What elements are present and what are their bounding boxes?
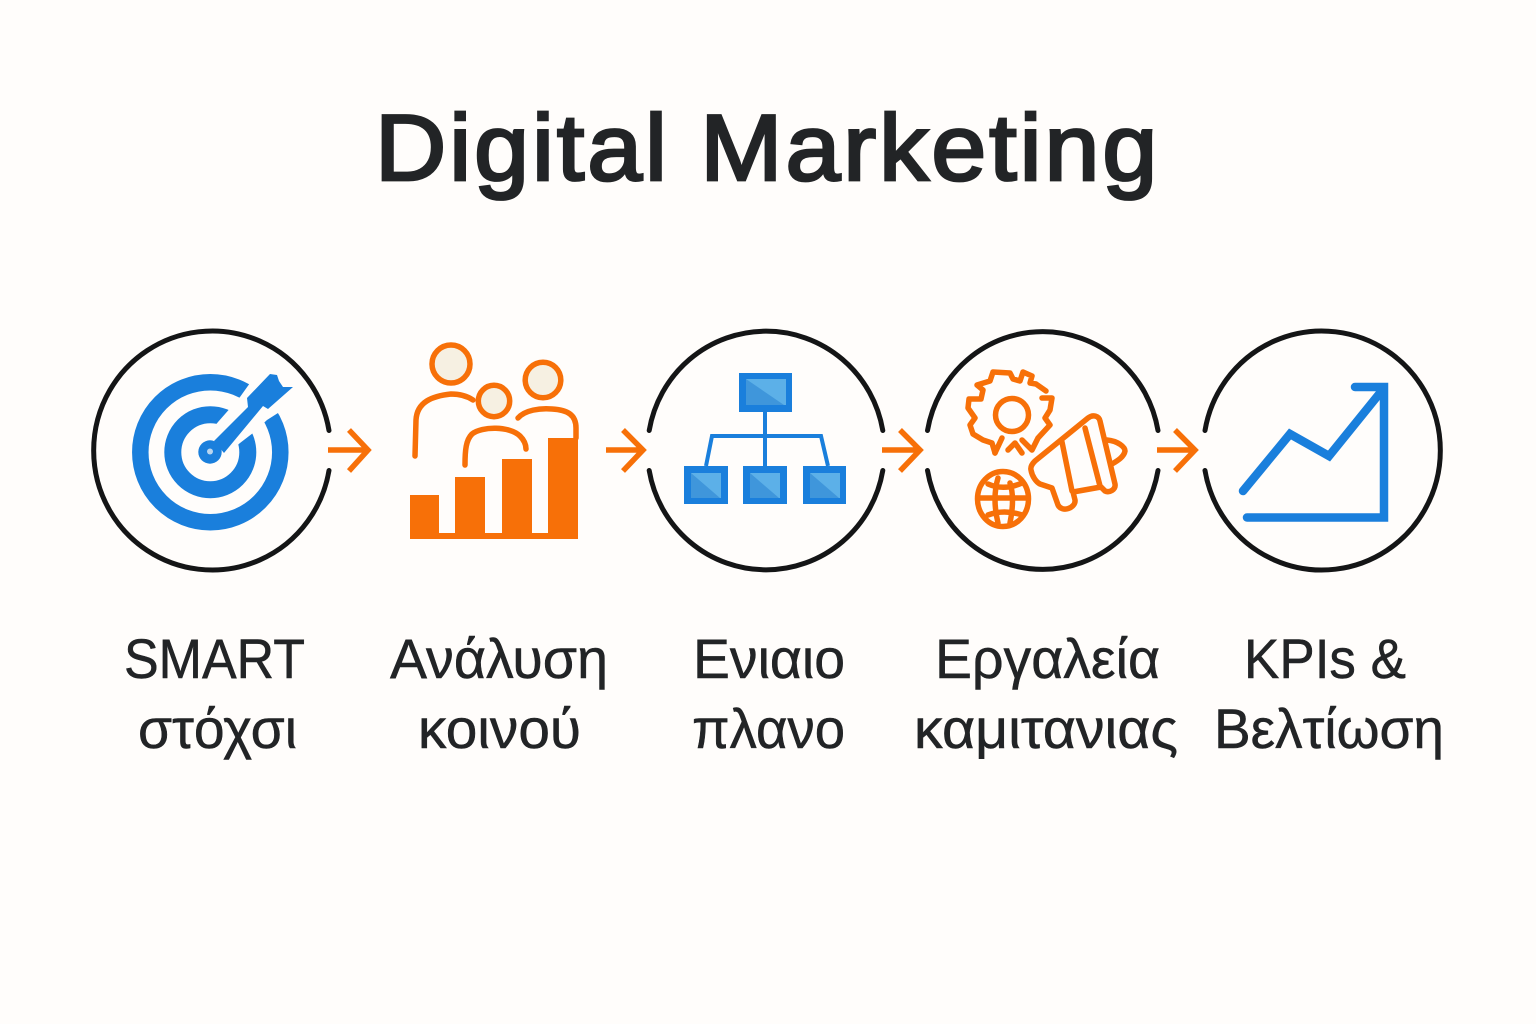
step 3: unified plan circle with org chart (649, 331, 883, 570)
label: unified plan: Ενιαιο (693, 627, 845, 690)
icon: gear (968, 372, 1052, 453)
icon: people heads (432, 345, 561, 417)
label: KPIs and improvement: Βελτίωση (1214, 697, 1444, 760)
label: KPIs and improvement (1214, 627, 1444, 760)
title: Digital Marketing (375, 96, 1157, 200)
icon: growth line chart (1243, 387, 1384, 518)
arrow 1 (328, 430, 368, 471)
icon: megaphone (1031, 416, 1125, 509)
arrow 2 (606, 430, 643, 471)
label: SMART goals: στόχσι (138, 697, 297, 760)
step 2: audience analysis icon (410, 345, 578, 539)
icon: people bodies (415, 394, 576, 465)
step 5: KPIs circle with growth chart (1205, 331, 1440, 570)
label: audience analysis: κοινού (418, 697, 581, 760)
label: SMART goals (124, 627, 305, 760)
label: audience analysis (390, 627, 608, 760)
arrow 4 (1157, 430, 1195, 471)
step 1: SMART goals circle with target icon (94, 331, 329, 570)
label: audience analysis: Ανάλυση (390, 627, 608, 690)
label: campaign tools: καμιτανιας (914, 697, 1178, 760)
label: KPIs and improvement: KPIs & (1244, 627, 1406, 690)
label: unified plan (692, 627, 845, 760)
step 4: campaign tools circle (928, 332, 1158, 569)
label: SMART goals: SMART (124, 627, 305, 690)
label: unified plan: πλανο (692, 697, 845, 760)
label: campaign tools (914, 627, 1178, 760)
icon: rising bars (410, 438, 578, 539)
label: campaign tools: Εργαλεία (935, 627, 1160, 690)
icon: org chart (684, 373, 846, 504)
arrow 3 (882, 430, 920, 471)
icon: target (140, 366, 296, 522)
icon: globe (978, 472, 1028, 526)
